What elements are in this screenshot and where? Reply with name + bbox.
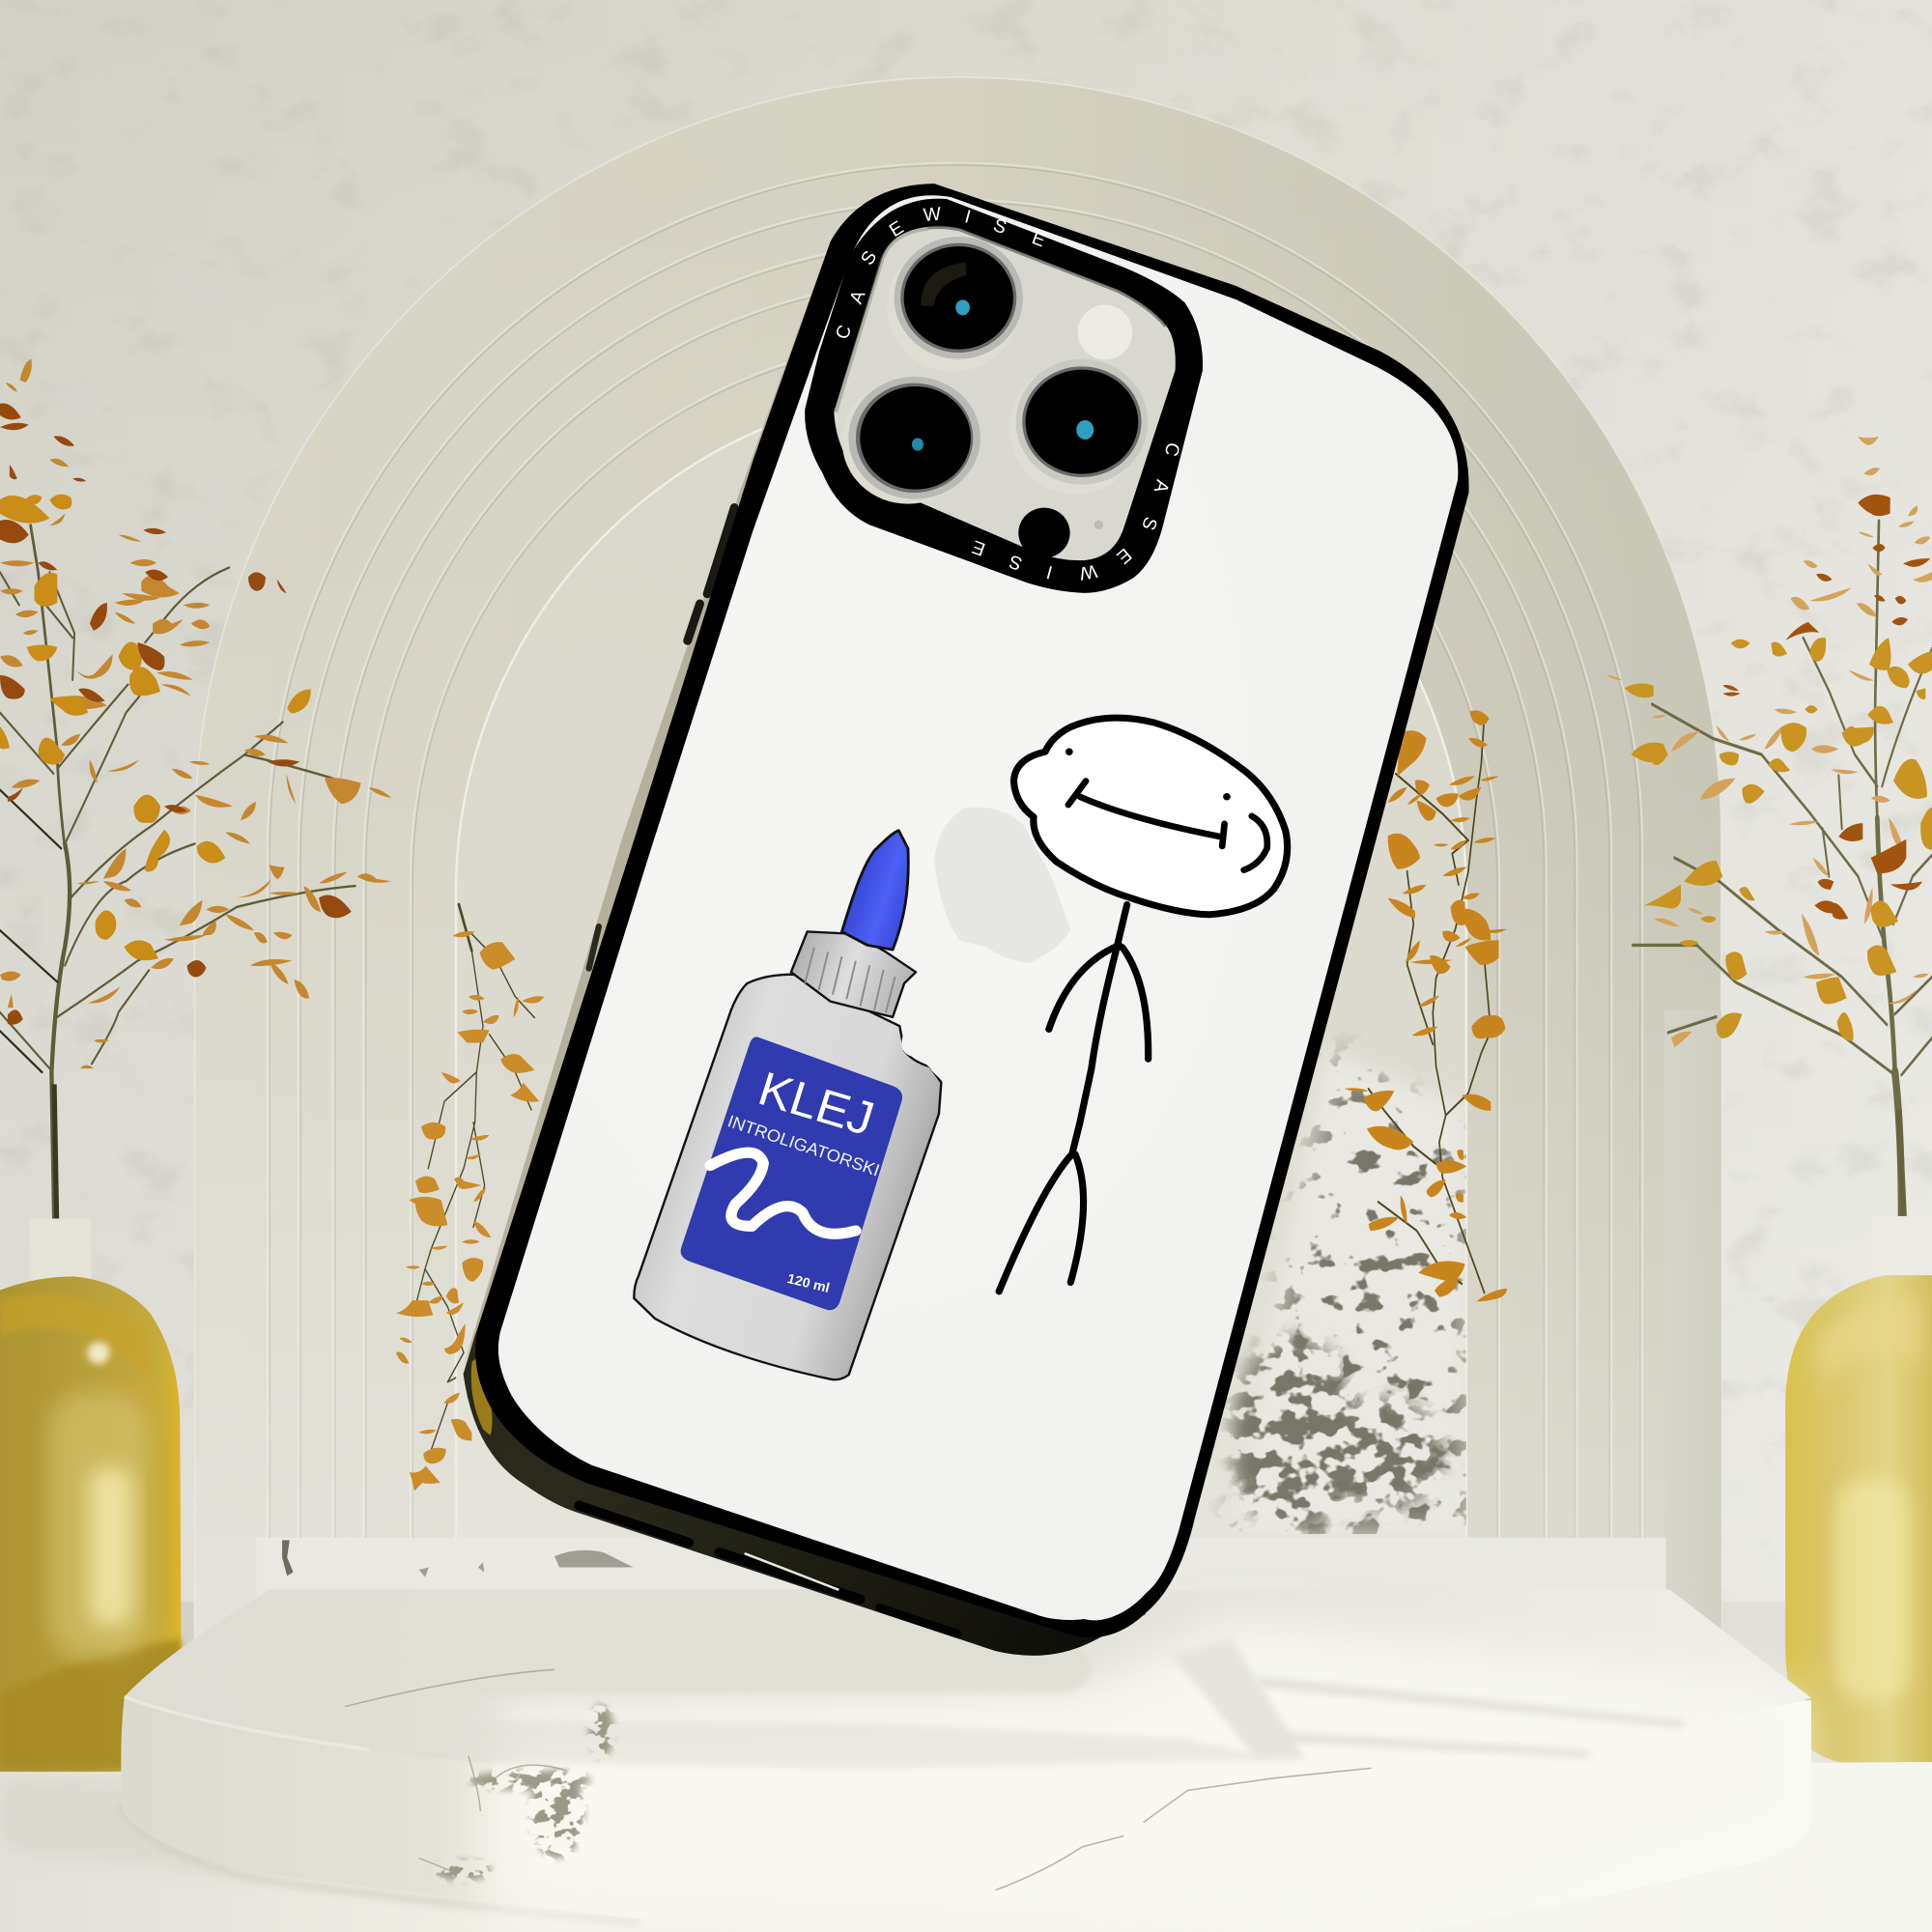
- phone side: [464, 480, 1146, 1656]
- tree leaves tan: [0, 359, 391, 1068]
- tree branches: [0, 526, 355, 1220]
- vase reflection: [88, 1342, 110, 1364]
- shade band across platform: [469, 1719, 1282, 1770]
- stick figure body: [999, 905, 1149, 1292]
- lidar sensor: [1018, 508, 1070, 558]
- platform rim light: [125, 1696, 370, 1749]
- tree leaves gold: [1625, 638, 1932, 1040]
- bump bezel: [805, 199, 1203, 593]
- vase stem: [1899, 1109, 1904, 1216]
- vase body: [0, 1276, 182, 1772]
- marble platform: [121, 1589, 1811, 1932]
- label: [681, 1037, 902, 1310]
- phone: [464, 184, 1469, 1656]
- left tree: [0, 359, 391, 1220]
- phone tan side sliver: [464, 242, 831, 1368]
- tree leaves dark: [1722, 495, 1930, 920]
- camera plate: [834, 226, 1176, 560]
- niche crack marks: [282, 1540, 634, 1577]
- vase stem: [54, 1084, 57, 1220]
- niche lower wall: [256, 1538, 1665, 1602]
- CASEWISE ring text: C: [833, 323, 856, 342]
- vase wide highlight: [49, 1392, 148, 1658]
- CASEWISE ring text: [833, 204, 1183, 583]
- plate top shadow: [927, 227, 1166, 327]
- right hanging vine: [1345, 710, 1507, 1301]
- bottle cap: [791, 931, 916, 1017]
- artwork: glue bottle and stick figure: [634, 718, 1288, 1379]
- vine stems: [1369, 716, 1491, 1293]
- right gold vase: [1785, 1109, 1932, 1767]
- black case bumper: [475, 184, 1469, 1637]
- vase neck: [30, 1218, 91, 1280]
- platform contact shadow: [118, 1805, 640, 1922]
- CASEWISE ring text: E: [970, 536, 988, 559]
- CASEWISE ring text: E: [886, 217, 907, 242]
- CASEWISE ring text: E: [1029, 228, 1048, 251]
- CASEWISE ring text: S: [990, 215, 1009, 239]
- CASEWISE ring text: A: [1150, 477, 1172, 495]
- face: [1066, 749, 1267, 870]
- marble lace veins: [1233, 1047, 1466, 1534]
- tree leaves dark: [0, 404, 352, 1025]
- bottom ports: [579, 1506, 957, 1634]
- platform thin cracks: [345, 1669, 1372, 1890]
- phone cast shadow: [407, 1597, 1091, 1693]
- CASEWISE ring text: A: [846, 288, 869, 307]
- platform veins: [433, 1704, 613, 1880]
- label text volume: 120 ml: [785, 1270, 832, 1295]
- nozzle: [842, 831, 908, 950]
- tree leaves tan: [1606, 437, 1932, 1047]
- inner niche: [456, 388, 1466, 1552]
- stick figure head: [1013, 718, 1288, 915]
- thin shade bands: [1260, 1676, 1685, 1758]
- label text KLEJ: KLEJ: [753, 1062, 880, 1146]
- CASEWISE ring text: S: [858, 247, 881, 269]
- camera bump: [805, 199, 1203, 593]
- platform top surface: [125, 1589, 1811, 1777]
- left hanging vine: [396, 904, 544, 1491]
- vase body: [1785, 1275, 1932, 1767]
- tree branches: [1633, 522, 1932, 1215]
- CASEWISE ring text: I: [962, 207, 973, 228]
- bottle body: [634, 975, 941, 1379]
- left gold vase: [0, 1084, 182, 1772]
- vase top glow: [0, 1294, 154, 1380]
- vase reflection: [1811, 1296, 1922, 1392]
- CASEWISE ring text: E: [1112, 544, 1135, 567]
- mic: [1094, 521, 1103, 529]
- shade wedge: [1171, 1638, 1306, 1759]
- label text INTROLIGATORSKI: INTROLIGATORSKI: [725, 1112, 882, 1180]
- marble lace dense shadow: [1233, 1337, 1441, 1534]
- flash: [1078, 305, 1132, 359]
- main lens: [887, 237, 1023, 372]
- vine leaves: [1345, 710, 1507, 1301]
- right tree: [1606, 437, 1932, 1215]
- arch lower light: [195, 77, 1721, 1651]
- right arch outer face: [1664, 1010, 1721, 1651]
- sunlit top and front: [493, 1627, 1802, 1922]
- CASEWISE ring text: W: [923, 204, 943, 226]
- CASEWISE ring text: C: [1160, 440, 1183, 458]
- arch texture: [195, 77, 1721, 1651]
- floor: [0, 1762, 1932, 1932]
- bite gap: [901, 1024, 951, 1082]
- side buttons: [589, 508, 734, 969]
- white marble zone behind phone: [1265, 1052, 1464, 1439]
- glue bottle: [634, 831, 951, 1379]
- plate shadow: [836, 229, 927, 412]
- platform front face: [121, 1696, 1811, 1932]
- vine leaves: [396, 931, 544, 1491]
- CASEWISE ring text: W: [1077, 560, 1098, 583]
- CASEWISE ring text: I: [1044, 561, 1055, 582]
- vase shading: [0, 1638, 182, 1772]
- vase neck: [1872, 1216, 1932, 1275]
- gold reflection: [471, 1355, 493, 1435]
- telephoto lens: [1009, 359, 1148, 495]
- tree leaves gold: [0, 495, 311, 960]
- vine stems: [415, 904, 534, 1449]
- CASEWISE ring text: S: [1007, 551, 1025, 574]
- ultra-wide lens: [842, 377, 980, 504]
- stepped arch: [195, 77, 1721, 1651]
- white case back: [498, 195, 1458, 1620]
- smudge: [934, 808, 1070, 963]
- vase highlight: [1836, 1479, 1910, 1700]
- cap ribs: [805, 948, 895, 1012]
- glue squiggle: [710, 1152, 856, 1234]
- vase highlight: [89, 1466, 133, 1627]
- floor shadow: [0, 1780, 271, 1879]
- CASEWISE ring text: S: [1137, 514, 1160, 532]
